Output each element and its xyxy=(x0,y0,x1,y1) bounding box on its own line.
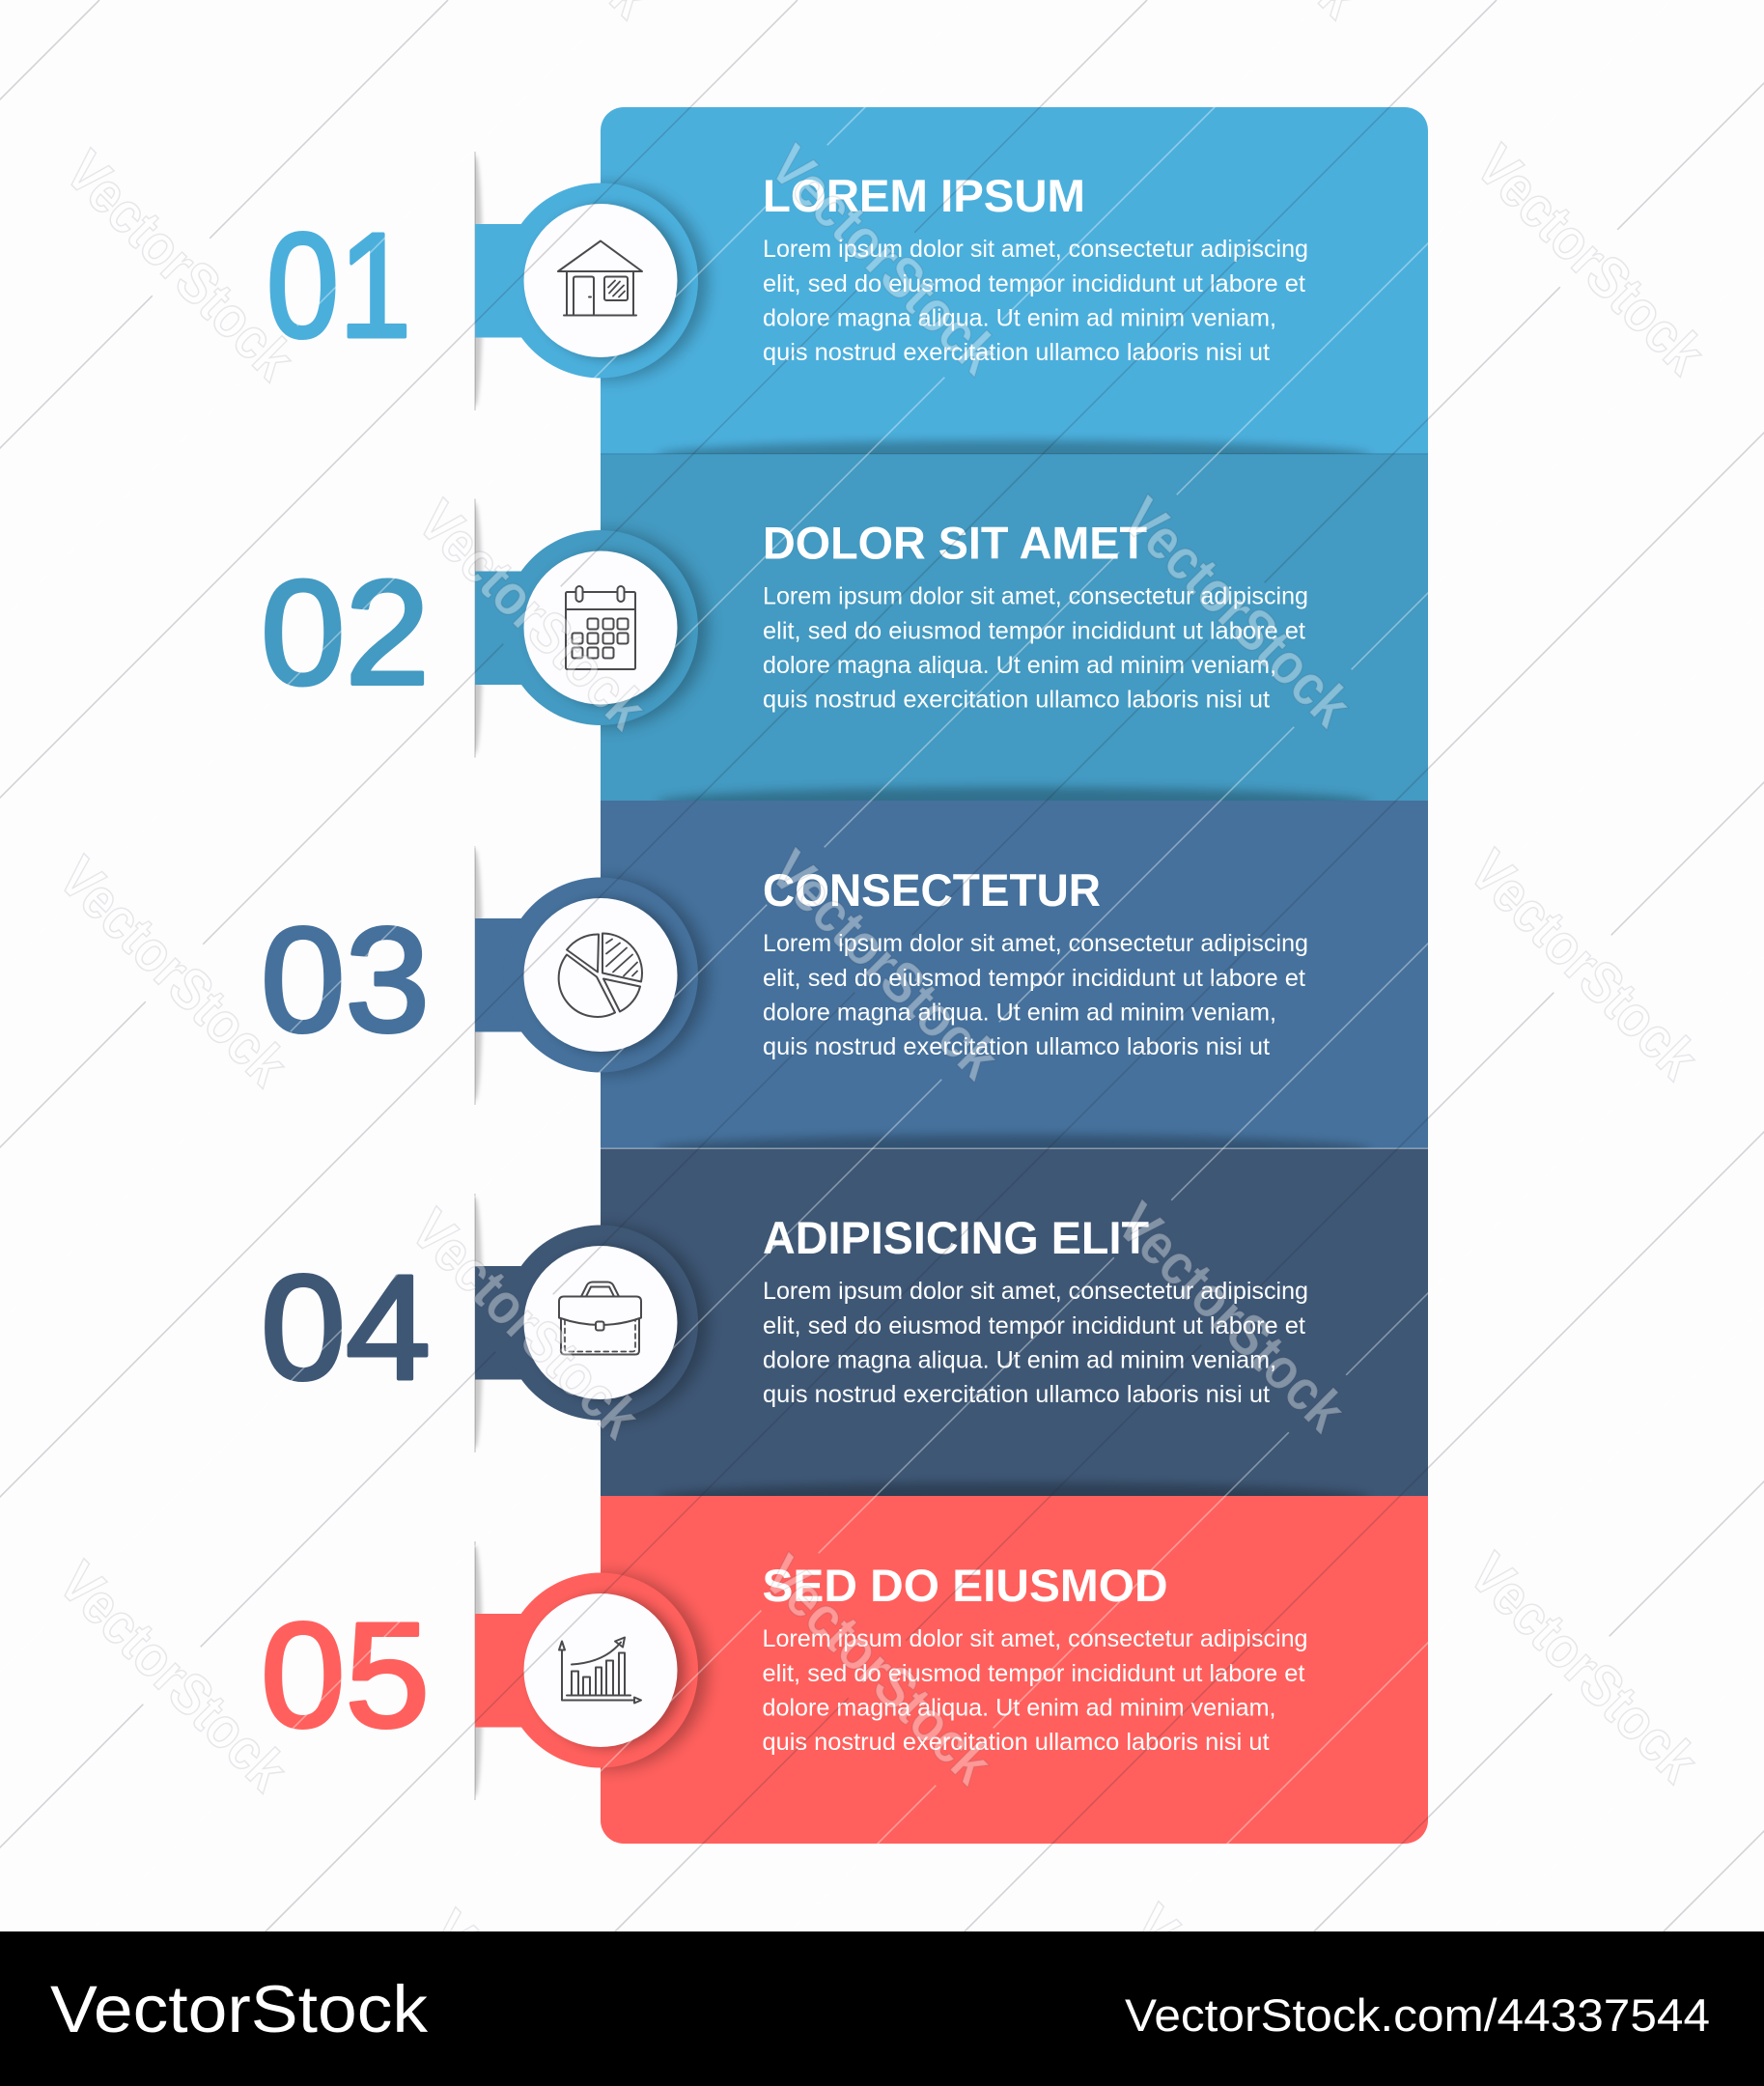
ring shadow 03 xyxy=(601,873,714,1080)
footer logo text: VectorStock xyxy=(50,1972,429,2046)
body text 02: quis nostrud exercitation ullamco laboris nisi ut xyxy=(763,686,1270,713)
watermark text: VectorStock xyxy=(406,488,659,742)
body text 05: quis nostrud exercitation ullamco laboris nisi ut xyxy=(763,1729,1270,1756)
step 02 xyxy=(261,498,1308,757)
number 01: 01 xyxy=(266,203,411,369)
connector tab 04 xyxy=(475,1266,543,1379)
ring shadow 01 xyxy=(601,176,716,388)
icon: growth chart xyxy=(559,1638,641,1704)
footer url text: VectorStock.com/44337544 xyxy=(1125,1989,1710,2041)
body text 05: dolore magna aliqua. Ut enim ad minim veniam, xyxy=(763,1694,1276,1721)
connector tab 05 xyxy=(475,1614,543,1727)
body text 02: dolore magna aliqua. Ut enim ad minim veniam, xyxy=(763,652,1276,679)
watermark text: VectorStock xyxy=(1110,485,1364,739)
body text 05 xyxy=(763,1625,1307,1756)
body text 03: dolore magna aliqua. Ut enim ad minim veniam, xyxy=(763,999,1276,1026)
body text 04: Lorem ipsum dolor sit amet, consectetur adipiscing xyxy=(763,1278,1308,1305)
number 04: 04 xyxy=(261,1244,431,1410)
watermark text: VectorStock xyxy=(53,138,307,392)
ring 05 xyxy=(503,1572,698,1767)
separator 02 xyxy=(475,498,484,757)
body text 03: quis nostrud exercitation ullamco laboris nisi ut xyxy=(763,1033,1270,1060)
step 01 xyxy=(266,152,1308,410)
separator 04 xyxy=(475,1194,484,1452)
body text 05: Lorem ipsum dolor sit amet, consectetur adipiscing xyxy=(763,1625,1307,1652)
body text 04: quis nostrud exercitation ullamco laboris nisi ut xyxy=(763,1381,1270,1408)
body text 03: elit, sed do eiusmod tempor incididunt ut labore et xyxy=(763,965,1305,992)
watermark text: VectorStock xyxy=(399,1197,653,1451)
ring shadow 02 xyxy=(601,524,714,734)
heading 05: SED DO EIUSMOD xyxy=(763,1560,1168,1611)
heading 02: DOLOR SIT AMET xyxy=(763,518,1147,568)
body text 01: Lorem ipsum dolor sit amet, consectetur adipiscing xyxy=(763,236,1308,263)
step 04 xyxy=(261,1194,1308,1452)
watermark text: VectorStock xyxy=(46,844,300,1098)
footer bar xyxy=(0,1931,1764,2086)
body text 04: elit, sed do eiusmod tempor incididunt ut labore et xyxy=(763,1312,1305,1339)
watermark text: VectorStock xyxy=(758,132,1012,386)
watermark text: VectorStock xyxy=(46,1549,300,1803)
separator 03 xyxy=(475,846,484,1105)
watermark text: VectorStock xyxy=(1464,132,1718,386)
heading 04: ADIPISICING ELIT xyxy=(763,1212,1149,1263)
number 02: 02 xyxy=(261,550,430,716)
connector tab 01 xyxy=(475,224,543,338)
watermark text: VectorStock xyxy=(751,1542,1005,1796)
body text 01: quis nostrud exercitation ullamco laboris nisi ut xyxy=(763,339,1270,366)
connector tab 02 xyxy=(475,572,543,685)
body text 01 xyxy=(763,236,1308,366)
number 03: 03 xyxy=(261,896,430,1062)
ring 01 xyxy=(503,183,698,379)
body text 02 xyxy=(763,583,1308,713)
icon: pie chart xyxy=(559,933,642,1017)
watermark text: VectorStock xyxy=(1105,1190,1358,1444)
separator 01 xyxy=(475,152,484,410)
body text 04 xyxy=(763,1278,1308,1408)
ring shadow 05 xyxy=(601,1565,716,1778)
icon: briefcase xyxy=(559,1283,641,1354)
body text 04: dolore magna aliqua. Ut enim ad minim veniam, xyxy=(763,1346,1276,1373)
body text 05: elit, sed do eiusmod tempor incididunt ut labore et xyxy=(763,1660,1305,1687)
separator 05 xyxy=(475,1541,484,1800)
icon: house xyxy=(558,241,642,315)
ring 02 xyxy=(503,530,698,725)
ring 04 xyxy=(503,1225,698,1420)
body text 02: Lorem ipsum dolor sit amet, consectetur adipiscing xyxy=(763,583,1308,610)
body text 02: elit, sed do eiusmod tempor incididunt ut labore et xyxy=(763,618,1305,645)
body text 03: Lorem ipsum dolor sit amet, consectetur adipiscing xyxy=(763,930,1308,957)
body text 01: elit, sed do eiusmod tempor incididunt ut labore et xyxy=(763,270,1305,297)
body text 01: dolore magna aliqua. Ut enim ad minim veniam, xyxy=(763,305,1276,332)
ring 03 xyxy=(503,877,698,1072)
ring shadow 04 xyxy=(601,1222,713,1426)
watermark text: VectorStock xyxy=(1457,1540,1711,1794)
number 05: 05 xyxy=(261,1592,430,1758)
body text 03 xyxy=(763,930,1308,1060)
step 03 xyxy=(261,846,1308,1105)
panel: coloured stack of five bands xyxy=(601,107,1428,1844)
connector tab 03 xyxy=(475,918,543,1031)
watermark text: VectorStock xyxy=(758,837,1012,1091)
watermark text: VectorStock xyxy=(1457,837,1711,1091)
icon: calendar xyxy=(566,586,635,669)
heading 01: LOREM IPSUM xyxy=(763,170,1085,221)
heading 03: CONSECTETUR xyxy=(763,864,1101,916)
step 05 xyxy=(261,1541,1307,1800)
